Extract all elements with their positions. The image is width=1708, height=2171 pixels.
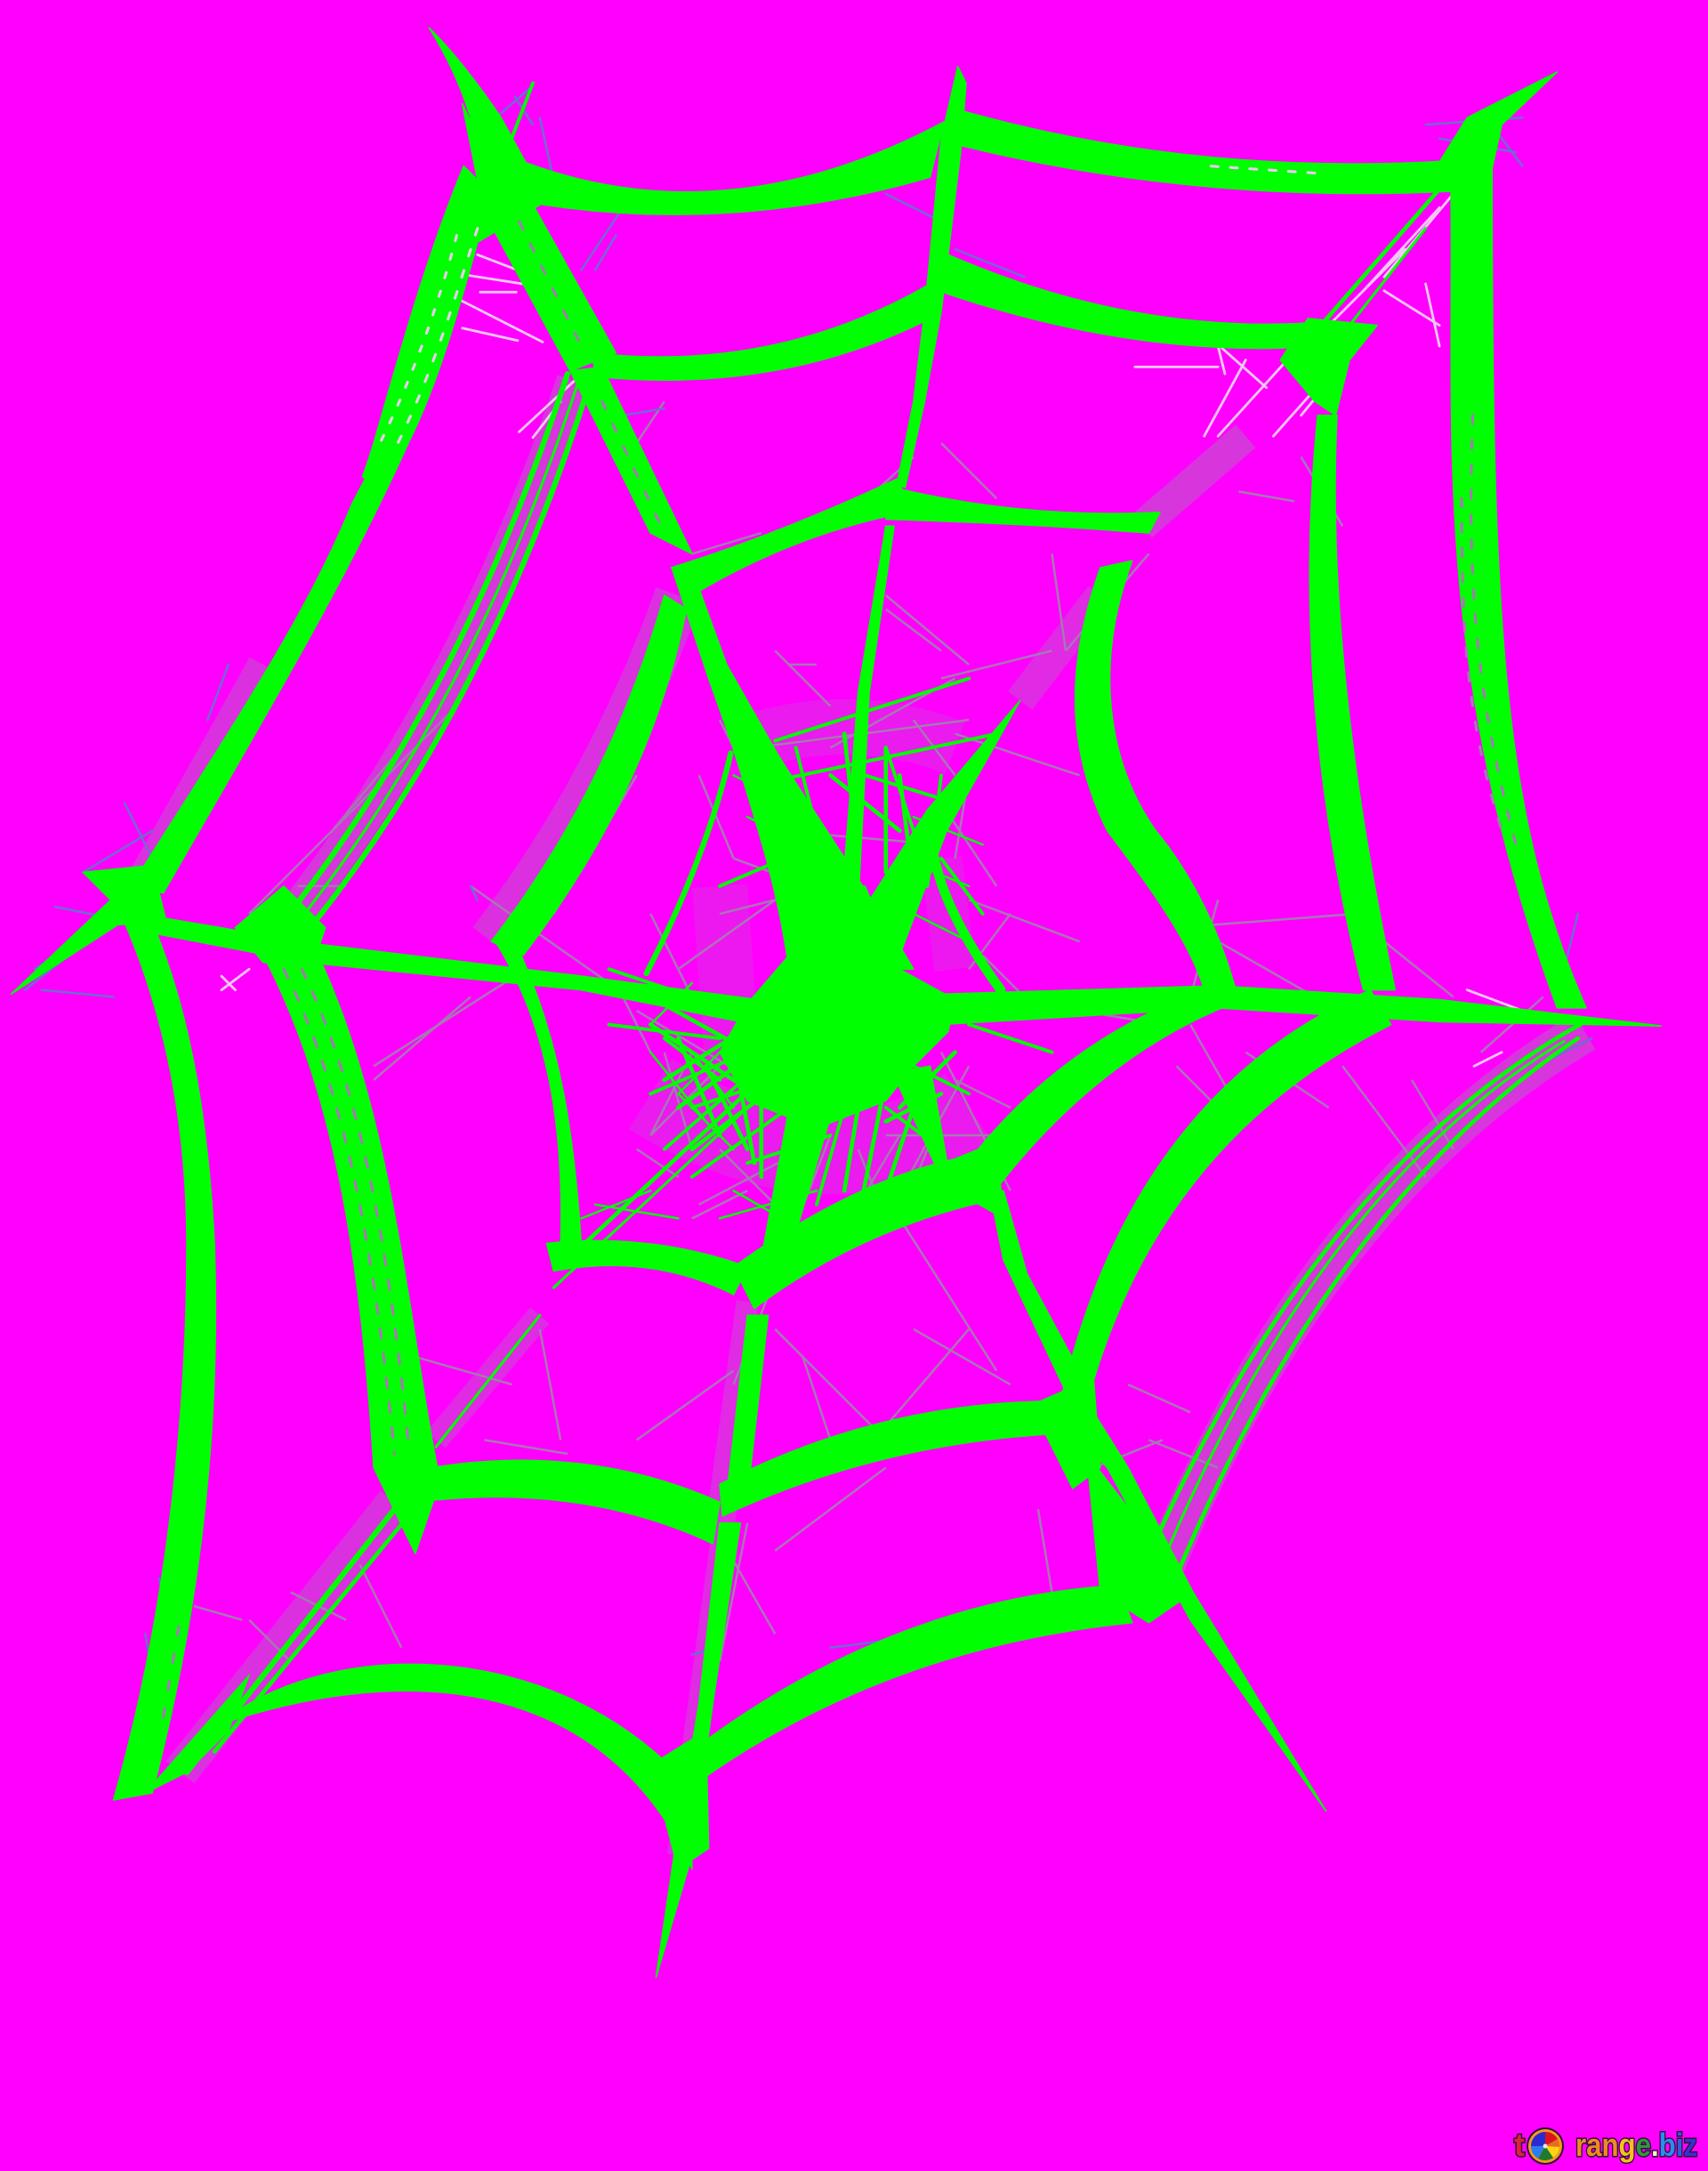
- middle ring segment: bottom left: [415, 1460, 720, 1544]
- inner ring segment: right: [1076, 561, 1235, 990]
- inner fine curves around centre: [581, 678, 1051, 1218]
- gap in upper left strand: [266, 478, 363, 662]
- inner ring segment: upper left: [491, 595, 687, 956]
- outer ring: [114, 108, 1586, 1869]
- grey thread halos: [139, 381, 1585, 1855]
- middle ring segment: right: [1309, 416, 1395, 990]
- inner ring segment: lower right: [962, 981, 1232, 1198]
- spoke: right horizontal to centre: [941, 986, 1661, 1026]
- spoke: inner ring to centre: [673, 570, 914, 969]
- node: upper right middle ring: [1280, 319, 1377, 416]
- watermark text: range.biz: [1575, 2127, 1697, 2163]
- blue and violet threads: [25, 83, 1591, 1717]
- white threads: [222, 194, 1522, 1066]
- spoke: top right to middle ring: [1315, 174, 1454, 332]
- spoke: bottom tip: [656, 1523, 740, 1977]
- watermark letter t: t: [1514, 2127, 1525, 2163]
- outer ring segment: bottom left: [207, 1664, 692, 1869]
- middle ring segment: bottom right: [720, 1401, 1073, 1516]
- outer ring segment: top left: [485, 122, 944, 214]
- inner ring segment: top left: [672, 478, 906, 595]
- outer ring segment: right: [1451, 166, 1586, 1008]
- grey hatch lines: [194, 401, 1543, 1661]
- node: bottom right inner ring: [927, 1142, 1003, 1218]
- spoke: lower right to centre: [893, 1066, 947, 1166]
- outer ring segment: top right: [944, 108, 1456, 194]
- node: lower right middle ring: [1031, 1377, 1100, 1489]
- spoke: top right corner: [1432, 72, 1557, 187]
- node: bottom outer ring: [650, 1731, 709, 1869]
- outer ring segment: lower right strands: [1142, 1021, 1585, 1593]
- watermark: torange.biz logo: [1514, 2127, 1697, 2165]
- inner ring segment: left: [495, 941, 581, 1246]
- middle ring segment: top left: [592, 284, 931, 380]
- node: lower right outer ring: [1086, 1454, 1193, 1623]
- icon: colour wheel: [1527, 2127, 1564, 2165]
- spoke: top left tip: [429, 28, 547, 242]
- spoke: inner ring to centre bottom: [759, 1094, 837, 1274]
- middle ring segment: upper left strands: [284, 374, 588, 934]
- spoke: middle ring to inner ring: [570, 367, 692, 553]
- middle ring segment: lower right: [1063, 990, 1391, 1405]
- spoke: left horizontal to centre: [139, 914, 789, 1031]
- node: left middle ring: [236, 886, 326, 969]
- spoke: upper right to centre: [861, 700, 1020, 956]
- node: bottom left outer ring: [145, 1675, 249, 1793]
- inner ring segment: bottom right: [734, 1156, 1003, 1309]
- spike: top left secondary: [501, 83, 533, 166]
- inner ring segment: bottom left: [547, 1240, 747, 1295]
- spoke: top to centre: [837, 526, 894, 956]
- spoke: top left to middle ring: [481, 180, 616, 371]
- outer ring segment: left: [114, 907, 215, 1800]
- central hub: [720, 886, 955, 1128]
- spoke: top tip down to inner ring: [897, 67, 966, 488]
- middle ring: [256, 249, 1395, 1554]
- middle ring segment: top right: [931, 249, 1332, 349]
- spoke: bottom left strands: [187, 1066, 775, 1772]
- outer ring segment: upper left: [132, 166, 491, 893]
- inner ring segment: top right: [886, 488, 1160, 533]
- node: far left: [11, 866, 166, 994]
- spoke: bottom middle ring to inner ring: [727, 1315, 769, 1496]
- spoke: lower right tip: [1066, 1412, 1326, 1811]
- middle ring segment: left: [256, 941, 440, 1554]
- outer ring segment: bottom right: [678, 1586, 1132, 1783]
- speckle in thick bands: [164, 166, 1519, 1717]
- inner ring: [491, 478, 1235, 1309]
- spoke: lower right to inner ring: [989, 1190, 1086, 1392]
